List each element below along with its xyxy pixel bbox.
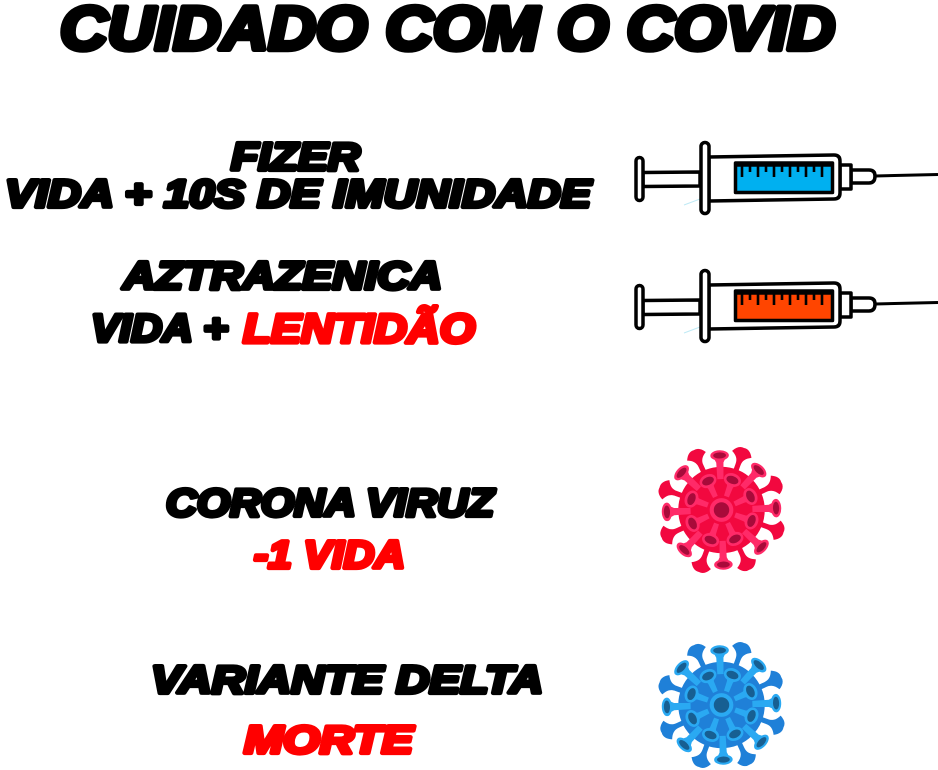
- heading: aztrazenica: AZTRAZENICA: [122, 255, 442, 298]
- panel: coronavirus text: [166, 482, 496, 577]
- panel: delta variant text: [151, 659, 543, 762]
- panel: AstraZeneca vaccine text: [91, 255, 475, 352]
- text: Lentidão: LENTIDÃO: [243, 306, 475, 352]
- icon: orange syringe: [636, 270, 938, 342]
- text: morte: MORTE: [244, 719, 414, 762]
- icon: blue virus: [656, 639, 787, 770]
- text: AstraZeneca effect: VIDA +: [91, 308, 228, 350]
- heading: variante delta: VARIANTE DELTA: [151, 659, 543, 702]
- heading: Fizer: FIZER: [231, 136, 360, 179]
- icon: red virus: [656, 444, 787, 576]
- panel: Pfizer vaccine text: [5, 136, 592, 216]
- icon: blue syringe: [636, 142, 938, 214]
- text: Pfizer effect: VIDA + 10S DE IMUNIDADE: [5, 173, 592, 216]
- heading: corona viruz: CORONA VIRUZ: [166, 482, 496, 525]
- text: minus one life: -1 VIDA: [254, 534, 405, 577]
